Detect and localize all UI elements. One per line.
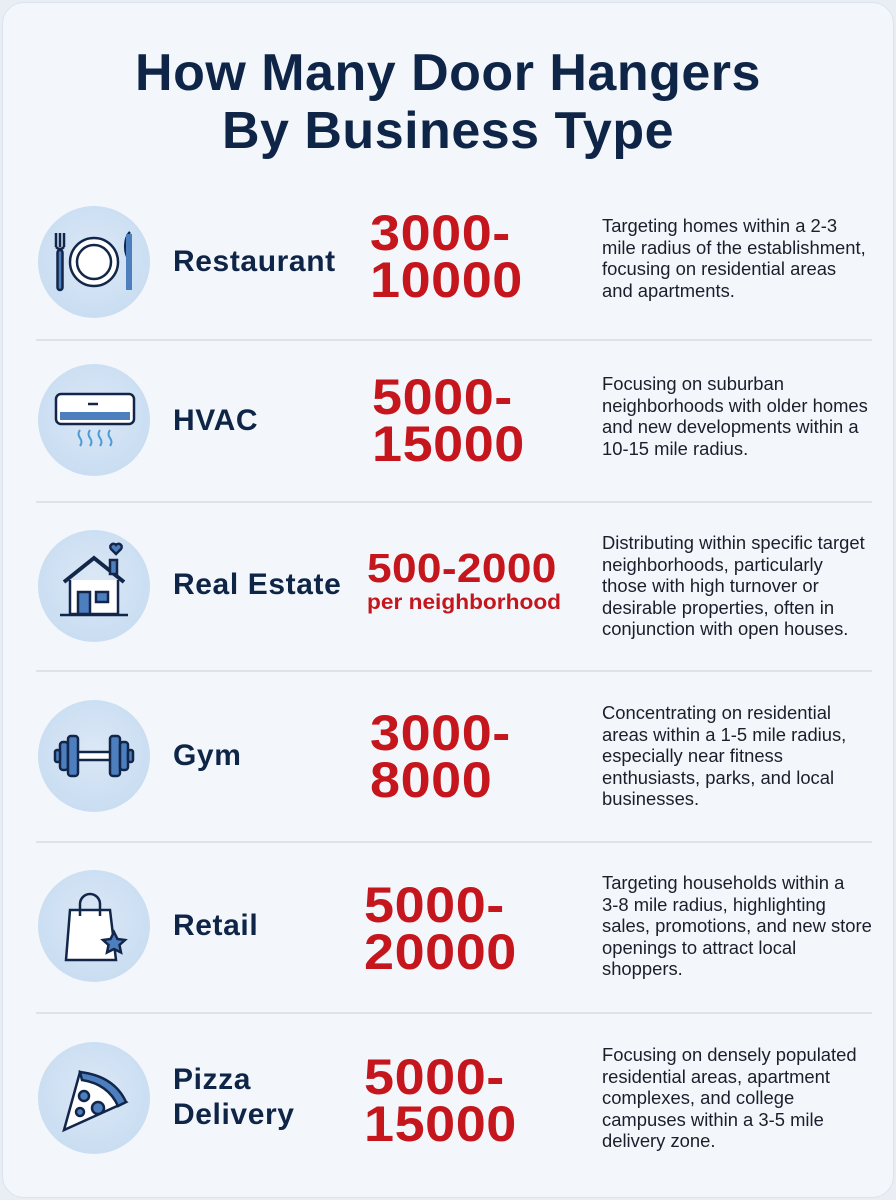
description: Focusing on densely populated	[602, 1044, 857, 1065]
description: enthusiasts, parks, and local	[602, 766, 834, 788]
title: By Business Type	[222, 102, 674, 160]
description: focusing on residential areas	[602, 258, 836, 279]
label: Real Estate	[173, 568, 341, 601]
number: 15000	[364, 1096, 517, 1152]
description: Distributing within specific target	[602, 532, 865, 553]
row: retail	[38, 870, 872, 982]
description: neighborhoods, particularly	[602, 554, 823, 574]
label: Pizza	[173, 1063, 251, 1096]
description: businesses.	[602, 788, 699, 809]
description: campuses within a 3-5 mile	[602, 1108, 824, 1130]
icon: pizza slice	[38, 1042, 150, 1154]
icon: shopping bag	[38, 870, 150, 982]
icon: air conditioner	[38, 364, 150, 476]
row: hvac	[38, 364, 868, 476]
label	[173, 1063, 295, 1131]
description: sales, promotions, and new store	[602, 915, 872, 936]
number	[370, 205, 523, 308]
description	[602, 702, 846, 809]
number	[367, 545, 561, 614]
number: 5000-	[372, 369, 513, 425]
number: per neighborhood	[367, 591, 561, 614]
number	[370, 705, 511, 808]
label: HVAC	[173, 404, 258, 437]
label: Gym	[173, 739, 242, 772]
row: pizza delivery	[38, 1042, 857, 1154]
description: areas within a 1-5 mile radius,	[602, 724, 846, 744]
description: delivery zone.	[602, 1130, 715, 1151]
description	[602, 872, 872, 979]
title	[135, 44, 761, 160]
icon: dumbbell	[38, 700, 150, 812]
icon: fork plate knife	[38, 206, 150, 318]
row: gym	[38, 700, 846, 812]
description: residential areas, apartment	[602, 1066, 830, 1086]
number	[364, 877, 517, 980]
number: 5000-	[364, 877, 505, 933]
description	[602, 1044, 857, 1151]
description: desirable properties, often in	[602, 596, 834, 618]
description: Targeting households within a	[602, 872, 844, 893]
number: 500-2000	[367, 545, 557, 591]
description: and new developments within a	[602, 416, 859, 437]
description: especially near fitness	[602, 745, 783, 766]
description	[602, 532, 865, 639]
label: Retail	[173, 909, 258, 942]
row: real estate	[38, 530, 865, 642]
number: 3000-	[370, 205, 511, 261]
description: openings to attract local	[602, 936, 796, 958]
number	[372, 369, 525, 472]
number: 20000	[364, 924, 517, 980]
number: 5000-	[364, 1049, 505, 1105]
number: 10000	[370, 252, 523, 308]
icon: house	[38, 530, 150, 642]
row: restaurant	[38, 205, 866, 318]
number: 3000-	[370, 705, 511, 761]
description: neighborhoods with older homes	[602, 394, 868, 416]
description	[602, 373, 868, 458]
description: mile radius of the establishment,	[602, 236, 866, 258]
description	[602, 215, 866, 301]
description: shoppers.	[602, 958, 683, 979]
description: and apartments.	[602, 280, 735, 300]
description: Focusing on suburban	[602, 373, 784, 394]
description: Concentrating on residential	[602, 702, 831, 723]
label: Delivery	[173, 1098, 295, 1131]
description: those with high turnover or	[602, 575, 819, 596]
description: Targeting homes within a 2-3	[602, 215, 837, 236]
number	[364, 1049, 517, 1152]
number: 8000	[370, 752, 492, 808]
description: 10-15 mile radius.	[602, 438, 748, 458]
label: Restaurant	[173, 245, 336, 278]
description: conjunction with open houses.	[602, 618, 848, 639]
description: 3-8 mile radius, highlighting	[602, 894, 826, 914]
number: 15000	[372, 416, 525, 472]
title: How Many Door Hangers	[135, 44, 761, 102]
description: complexes, and college	[602, 1087, 794, 1108]
